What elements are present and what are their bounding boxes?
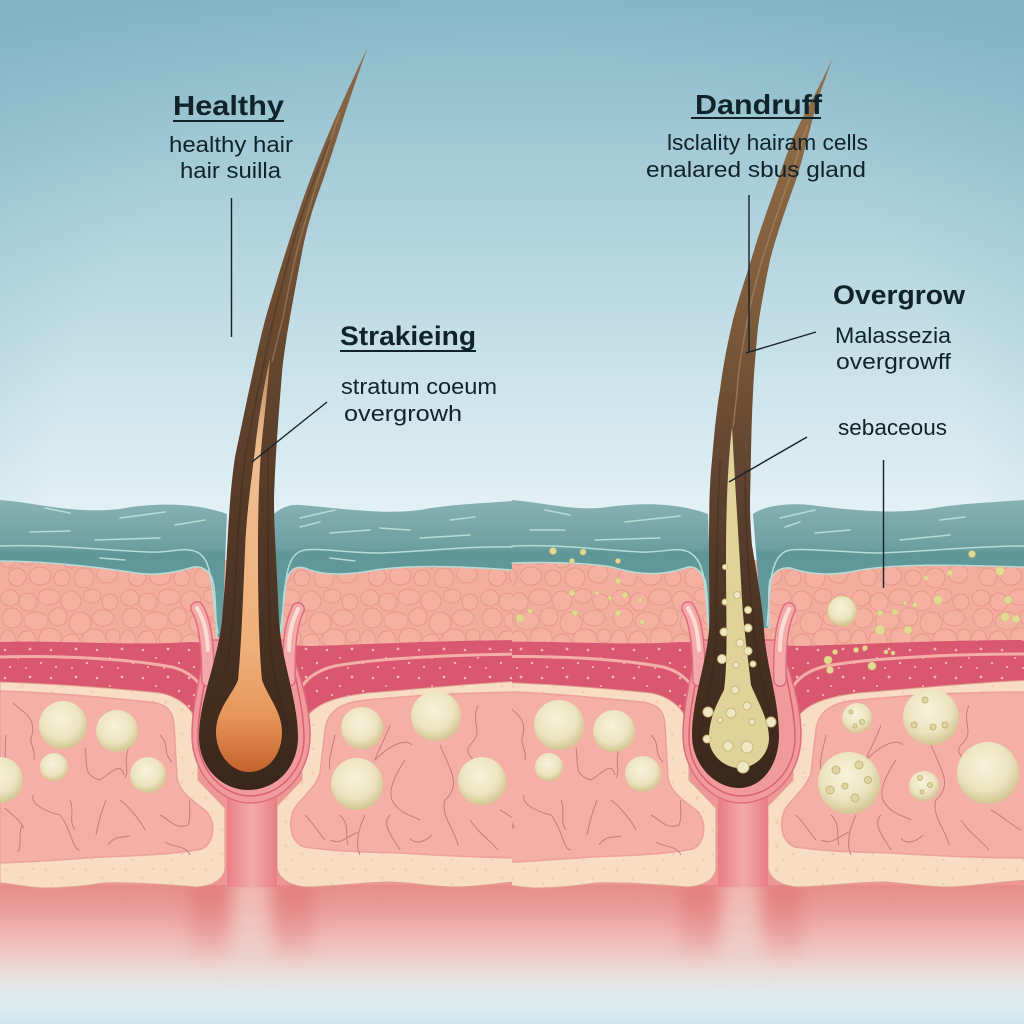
text: healthy description — [169, 132, 293, 183]
text: stratum description — [341, 374, 497, 426]
enlarged sebum droplet — [828, 596, 856, 626]
heading: Strakieing: Strakieing — [340, 321, 476, 351]
dandruff fat globules — [534, 689, 1019, 814]
text: Malassezia description: overgrowff — [836, 349, 952, 374]
heading: Healthy: Healthy — [173, 90, 284, 121]
dandruff hair core — [709, 427, 769, 768]
text: healthy description: healthy hair — [169, 132, 293, 157]
dandruff hair shaft and follicle — [692, 57, 833, 788]
text: Malassezia description: Malassezia — [835, 323, 952, 348]
healthy fat globules — [0, 691, 506, 810]
lower tissue fading to background — [0, 880, 1024, 1024]
heading: Dandruff: Dandruff — [695, 89, 823, 120]
stratum corneum layer: healthy — [0, 500, 512, 637]
dandruff flakes in follicle — [703, 564, 776, 773]
text: stratum description: stratum coeum — [341, 374, 497, 399]
healthy hair bulb and core — [216, 358, 282, 772]
text: dandruff description: enalared sbus gland — [646, 157, 866, 182]
healthy hair shaft and follicle — [199, 47, 368, 790]
panel: dandruff skin layers — [491, 560, 1024, 888]
text: healthy description: hair suilla — [180, 158, 282, 183]
text: dandruff description: lsclality hairam cells — [667, 130, 868, 155]
teal surface highlights — [0, 508, 1024, 637]
leader lines — [232, 195, 884, 588]
text: Malassezia description — [835, 323, 952, 374]
dandruff flakes in skin — [516, 548, 1020, 674]
stratum corneum layer: dandruff — [512, 500, 1024, 630]
text: dandruff description — [646, 130, 868, 182]
heading: Overgrow: Overgrow — [833, 280, 966, 310]
text: sebaceous: sebaceous — [838, 415, 947, 440]
panel: healthy skin layers — [0, 560, 540, 888]
text: stratum description: overgrowh — [344, 401, 462, 426]
